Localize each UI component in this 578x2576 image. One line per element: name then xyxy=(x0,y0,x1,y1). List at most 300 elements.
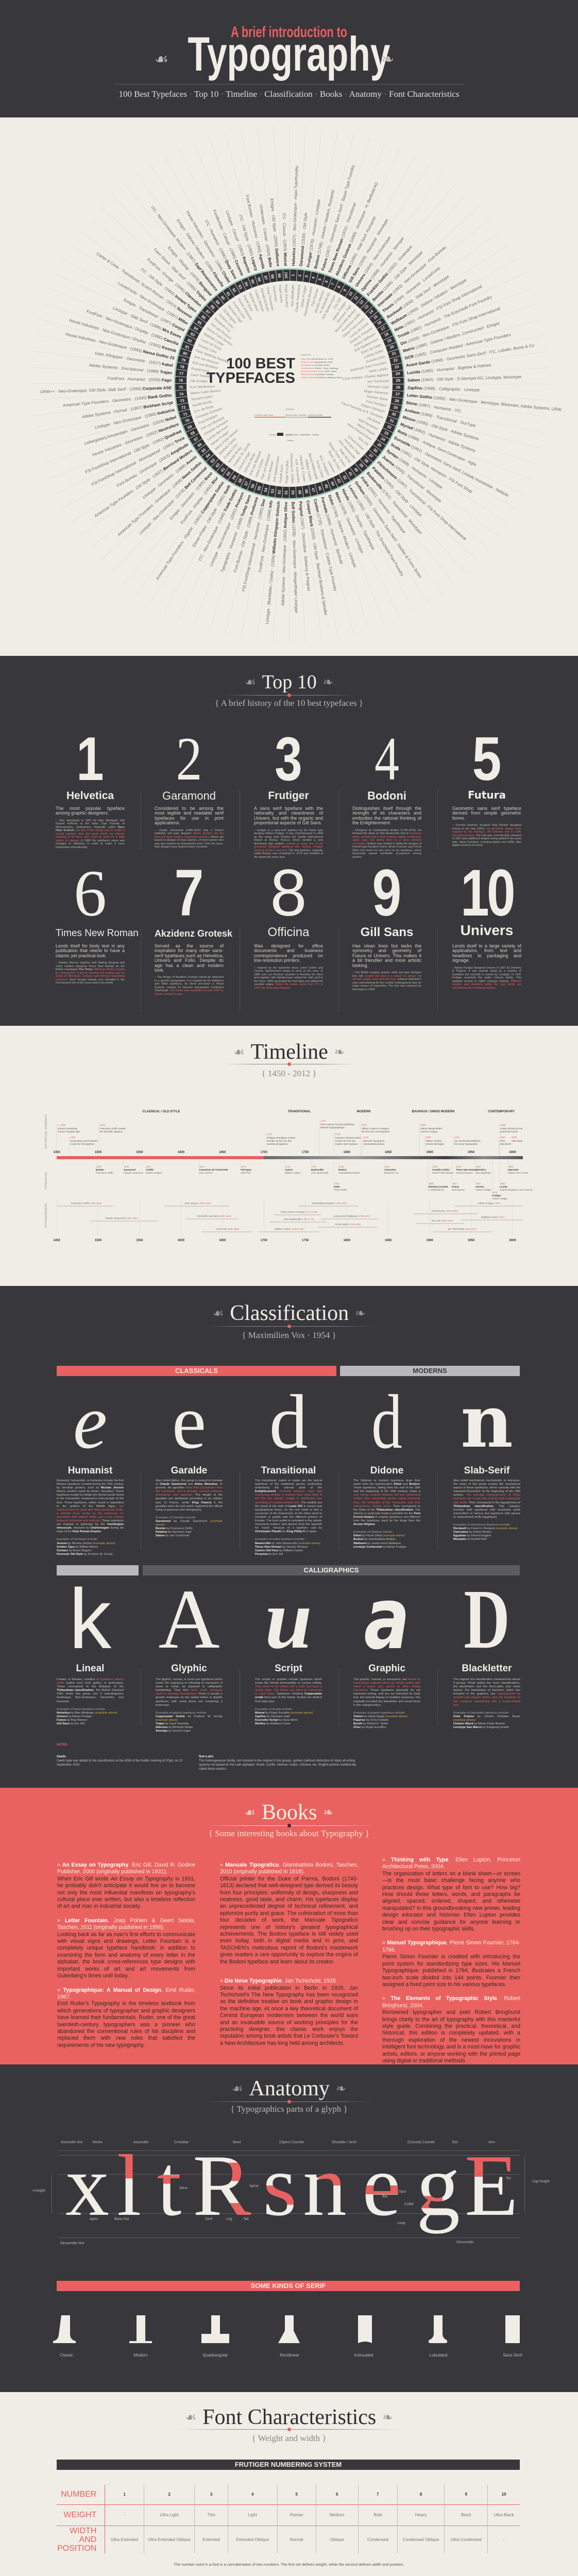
title: Typography: Typography xyxy=(188,27,390,81)
typographers: Claude Garamond 1480-1561 xyxy=(105,1217,138,1220)
panel: 100 best typefaces wheel: Minion (1990) · Old Style · Adobe Systems xyxy=(402,415,479,441)
panel: 100 best typefaces wheel: Jan Tschichold xyxy=(367,379,389,384)
heading: Anatomy: { Typographics parts of a glyph } xyxy=(230,2104,348,2114)
typographers: Giambattista Bodoni 1740-1813 xyxy=(312,1202,347,1205)
panel: 100 best typefaces wheel: 51 xyxy=(284,490,288,495)
typefaces: Claude Garamond xyxy=(124,1172,143,1174)
panel: 100 best typefaces wheel: Scala (1991) · Old Style, Humanist · FSI Font Shop xyxy=(390,442,473,494)
typefaces: 1932 xyxy=(456,1165,462,1168)
panel: 100 best typefaces wheel: Aldo Novarese xyxy=(358,418,379,431)
top10 item 2: Garamond xyxy=(155,724,224,849)
serif: classic xyxy=(53,2315,76,2343)
typographers: Paul Renner 1878-1956 xyxy=(432,1210,458,1213)
serif: modern xyxy=(129,2315,152,2343)
panel: 100 best typefaces wheel: 84 xyxy=(193,326,199,332)
panel: 100 best typefaces wheel: Din (1926) · Neo-Grotesque · FSI Font Shop International xyxy=(400,306,501,346)
class: Humanist: Humanist, humanistic, or humanes include the first Roman typefaces created during the 15th century by Venetian printers, such as Nicolas Jenson (hence another name for these, Venetian). These typefaces sought to imitate the formal hands found in the humanistic renaissance manuscripts of the time. These typefaces, rather round in opposition to the gothics of the Middle Ages, are characterized by short and thick bracketed serifs, a slanted cross stroke on the lowercase 'e', ascenders with slanted serifs, and a low contrast between horizontal and verticals. These typefaces are inspired in particular by the Carolingian minuscule, imposed by Charlemagne during his reign of the Holy Roman Empire. Jenson by Nicolas Jenson (example above) xyxy=(57,1479,124,1545)
panel: 100 best typefaces wheel: 100 xyxy=(284,272,288,279)
wheel legend: Designer xyxy=(269,434,277,436)
panel: 100 best typefaces wheel: Lettergieterij Amsterdam · Geometric · (1929) Nobel xyxy=(84,415,177,446)
table: frutiger numbering: Thin xyxy=(207,2513,215,2517)
historical moments: the first sans serif typeface xyxy=(362,1130,390,1133)
heading: Anatomy: ☙ xyxy=(232,2081,243,2096)
typefaces: Jean Jannon xyxy=(199,1172,213,1174)
panel: top 10 xyxy=(0,656,578,1026)
panel: 100 best typefaces wheel: Underware · Casual · (2004) Bello xyxy=(259,205,273,268)
panel: 100 best typefaces wheel: 90 xyxy=(220,295,226,301)
panel: 100 best typefaces wheel: Adrian Frutiger xyxy=(332,300,348,321)
typographers: Firmin Didot 1764-1836 xyxy=(335,1223,361,1226)
historical moments: 1886 xyxy=(420,1124,426,1126)
typographers: Jean Jannon 1580-1658 xyxy=(184,1202,211,1205)
historical moments: 1928 xyxy=(454,1136,460,1139)
panel: 100 best typefaces wheel: Erik van Blokland xyxy=(249,451,263,476)
year axis top: 1600 xyxy=(178,1151,185,1154)
panel: 100 best typefaces wheel: Akzidenz Grotesk (1898) · Grotesque · H. Berthold AG xyxy=(334,181,379,277)
anatomy glyph diagram xyxy=(65,2137,518,2234)
wheel center title: Roger Black (Danilo Black Inc., USA) xyxy=(301,358,333,360)
vertical row labels: TYPOGRAPHERS xyxy=(45,1203,48,1228)
books column 1 xyxy=(57,1862,195,2048)
heading: Anatomy xyxy=(208,2077,370,2114)
panel: 100 best typefaces wheel: Michael Want xyxy=(248,292,259,312)
panel: 100 best typefaces wheel: Lucas de Groot xyxy=(349,322,369,339)
panel: 100 best typefaces wheel: 72 xyxy=(181,405,186,410)
panel: 100 best typefaces wheel: Erik Spiekermann xyxy=(273,455,280,482)
panel: 100 best typefaces wheel: 33 xyxy=(383,430,389,436)
panel: 100 best typefaces wheel: 31 xyxy=(389,418,395,423)
panel: 100 best typefaces wheel: House Industries xyxy=(237,298,253,321)
table: frutiger numbering: NUMBER xyxy=(61,2490,96,2499)
typefaces: Caractères de l'Université xyxy=(199,1168,228,1171)
anatomy labels: Bowl xyxy=(233,2141,241,2144)
class: Blackletter: Examples of blackletter typefaces include: xyxy=(453,1711,509,1715)
class: Transitional: Examples of realist typefaces include: xyxy=(255,1538,305,1541)
panel: 100 best typefaces wheel: Morris Fuller Benton xyxy=(206,327,233,347)
historical moments: William Caslon IV designs xyxy=(362,1127,389,1130)
historical moments: François Ambroise Didot xyxy=(335,1137,361,1139)
panel: 100 best typefaces wheel: Emigre · Transitional · (1997) Corpid xyxy=(123,298,185,333)
panel: 100 best typefaces wheel: Ronald Arnholm xyxy=(260,288,269,312)
panel: 100 best typefaces wheel: FontFont · Neo-Grotesque · (1996) Info xyxy=(258,500,274,572)
typographers: Pierre Simon Fournier 1712-1768 xyxy=(281,1211,318,1214)
typographers: Jan Tschichold 1902-1974 xyxy=(448,1228,477,1231)
book: Die Neue Typographie: Since its initial publication in Berlin in 1928, Jan Tschichold's The New Typography has been recognized as the definitive treatise on book and graphic design in the machine age. At once a key theoretical document of Central European modernism between the world wars and an invaluable source of working principles for the practicing designer, this classic work enjoys the reputation among book artists that Le Corbusier's Toward a New Architecture has long held among architects. xyxy=(220,1985,358,2046)
class: Slab-Serif: Clarendon by Robert Besley xyxy=(453,1531,491,1534)
panel: 100 best typefaces wheel: Volker Küster xyxy=(254,458,265,478)
anatomy labels: Arm xyxy=(488,2141,495,2144)
table: frutiger numbering: 2 xyxy=(168,2492,171,2497)
class: Lineal: Lineal xyxy=(76,1663,104,1674)
typefaces: Tobias Frere-Jones xyxy=(508,1172,529,1174)
panel: 100 best typefaces wheel: Carol Twombly & R. Slimbach xyxy=(341,401,384,420)
anatomy labels: x-height xyxy=(32,2189,45,2193)
panel: 100 best typefaces wheel: 5 xyxy=(317,278,322,281)
panel: 100 best typefaces wheel: Interstate (1993) · Neo-Grotesque · Font Bureau xyxy=(377,245,447,308)
panel: 100 best typefaces wheel: 92 xyxy=(231,287,237,293)
typefaces: Max Miedinger xyxy=(475,1172,491,1174)
anatomy labels: Spur xyxy=(399,2190,406,2194)
panel: 100 best typefaces wheel: 2 xyxy=(297,274,302,277)
panel: 100 best typefaces wheel: FSI FontShop International · Old Style · (1992) Quadraat xyxy=(84,429,182,474)
heading: Books: ☙ xyxy=(244,1805,256,1820)
panel: 100 best typefaces wheel: ITC · Old Style · (1992) Legacy xyxy=(238,214,259,272)
class: Lineal: Futura by Paul Renner xyxy=(57,1719,88,1722)
table: frutiger numbering: Ultra Condensed xyxy=(451,2537,482,2542)
panel: 100 best typefaces wheel: Hans Eduard Meier xyxy=(347,422,373,442)
anatomy labels: (Open) Counter xyxy=(279,2141,304,2144)
anatomy labels: Spine xyxy=(249,2184,259,2188)
panel: 100 best typefaces wheel: 70 xyxy=(184,418,190,423)
top10 item 5: Futura: – German typeface designer Paul Renner designed Futura in the mid 1920's. Its geometric shapes were inspired by the Bauhaus, the German arts & crafts school/movement. The font was commercially released in 1927 with additional weights being added in the years after. Many foundries, including Adobe and URW, offer digital versions of Futura. xyxy=(452,824,521,847)
panel: 100 best typefaces wheel: Adobe Systems · Formal · (1997) Bickham Script xyxy=(82,400,174,419)
anatomy labels: Ascender xyxy=(133,2141,149,2144)
panel: 100 best typefaces wheel: 87 xyxy=(205,309,211,315)
panel: 100 best typefaces wheel: Stanley Morison xyxy=(314,290,326,314)
panel: 100 best typefaces wheel: Robert Slimbach xyxy=(361,403,385,414)
panel: 100 best typefaces wheel: 24 xyxy=(395,371,400,376)
top10 item 7: Akzidenz Grotesk: 7 xyxy=(175,856,203,930)
panel: 100 best typefaces wheel: 22 xyxy=(393,358,398,363)
panel: 100 best typefaces wheel: 80 xyxy=(182,351,188,357)
typefaces: 1621 xyxy=(199,1165,205,1168)
class: Lineal: Univers by Adrian Frutiger xyxy=(57,1715,92,1718)
bar: some kinds of serif: SOME KINDS OF SERIF xyxy=(251,2282,326,2290)
panel: 100 best typefaces wheel: FSI FontShop International · Humanist · (1995) Dax xyxy=(241,498,266,592)
panel: 100 best typefaces wheel: 52 xyxy=(277,489,282,495)
panel: 100 best typefaces wheel: Emigre · Old Style · (2000) Dalliance xyxy=(269,198,280,267)
anatomy glyph diagram: e xyxy=(362,2137,401,2234)
panel: 100 best typefaces wheel: 18 xyxy=(383,331,389,337)
top10 item 10: Univers: Univers xyxy=(461,922,513,938)
year axis bottom: 1800 xyxy=(344,1239,351,1242)
heading: Classification: Classification xyxy=(230,1301,349,1325)
table: frutiger numbering: 5 xyxy=(295,2492,298,2497)
class: Glyphic: A xyxy=(158,1572,220,1666)
panel: 100 best typefaces wheel: 7 xyxy=(330,282,335,286)
panel: 100 best typefaces wheel: David Quay xyxy=(242,295,253,312)
panel: 100 best typefaces wheel: 74 xyxy=(179,392,184,397)
typefaces: Giambattista Bodoni xyxy=(338,1172,360,1174)
class: Script: Kuenstler Script by Hans Bohn xyxy=(255,1719,298,1722)
class: Garalde: Palatino by Hermann Zapf xyxy=(156,1531,191,1534)
historical moments: Giambattista Bodoni xyxy=(363,1143,384,1145)
panel: 100 best typefaces wheel: Richard Lipton xyxy=(191,395,213,402)
panel: 100 best typefaces wheel: Chauncey H. Griffith xyxy=(290,453,294,483)
panel: 100 best typefaces wheel: ITC · Neo-Grotesque, Modern · (1987) Zapf Renaissance xyxy=(150,205,219,293)
top10 item 9: Gill Sans: Has clean lines but lacks the symmetry and geometry of Futura or Univers. This makes it a bit friendlier and more artistic looking. xyxy=(352,943,421,968)
panel: 100 best typefaces wheel xyxy=(30,125,562,643)
panel: 100 best typefaces wheel: 91 xyxy=(225,291,231,297)
typefaces: 1994 xyxy=(508,1165,514,1168)
panel: 100 best typefaces wheel: Matrix (1986) · Didone / Modern, Constructed · Emigre xyxy=(402,321,500,353)
historical moments: the first italic typeface xyxy=(100,1130,123,1133)
year axis top: 1450 xyxy=(53,1151,60,1154)
notes: Non-Latin xyxy=(199,1755,213,1758)
panel: 100 best typefaces wheel: Bram de Does xyxy=(361,343,382,355)
panel: 100 best typefaces wheel: Peter Matthias Noordzij xyxy=(195,349,229,364)
serif shapes: Quadrangular xyxy=(203,2353,228,2358)
typefaces: 1927 xyxy=(452,1182,457,1185)
typefaces: Garamond xyxy=(124,1168,135,1171)
panel: 100 best typefaces wheel: Christian Schwartz xyxy=(196,407,223,420)
top10 item 5: Futura: Geometric sans serif typeface derived from simple geometric forms. xyxy=(452,806,521,821)
panel: 100 best typefaces wheel: Arnhem (1999) · Transitional · OurType xyxy=(404,408,477,428)
class: Didone xyxy=(353,1379,420,1549)
table: frutiger numbering: 7 xyxy=(377,2492,379,2497)
historical moments: Philippe Grandjean creates xyxy=(267,1137,296,1139)
book: Thinking with Type: The organization of letters on a blank sheet—or screen—is the most basic challenge facing anyone who practices design. What type of font to use? How big? How should those letters, words, and paragraphs be aligned, spaced, ordered, shaped, and otherwise manipulated? In this groundbreaking new primer, leading design educator and historian Ellen Lupton provides clear and concise guidance for anyone learning or brushing up on their typographic skills. xyxy=(382,1871,520,1932)
historical moments: 1984 xyxy=(500,1136,506,1139)
class: Garalde: Also called Aldine, this group is named in homage to Claude Garamond and Aldus Manutius. In general, the garaldes have finer proportions than the humanists, and a stronger contrast between downstroke and upstroke. The weight of the garaldes are distributed according to an oblique axis. In France, under King Francis I, the garaldes were the tool which supported the official fixing of grammar and orthography. Garamond by Claude Garamond (example above) xyxy=(156,1479,223,1527)
year axis bottom: 1950 xyxy=(468,1239,475,1242)
class: Didone: d xyxy=(371,1379,402,1465)
panel: 100 best typefaces wheel: Typography · Humanist · (1988) Today Sans xyxy=(220,494,252,573)
table: frutiger numbering: Extended xyxy=(202,2537,220,2542)
panel: 100 best typefaces wheel: Sumner Stone xyxy=(366,395,388,402)
typefaces: Robert Granjon xyxy=(146,1172,162,1174)
panel: 100 best typefaces wheel: Sabon (1964) · Old Style · D.Stempel AG, Linotype, Monotype xyxy=(407,375,522,383)
top10 item 8: Officina: Was designed for office documents and business correspondence produced on low-resolution printers. xyxy=(254,943,323,963)
panel: 100 best typefaces wheel: Hermann Zapf xyxy=(343,438,361,456)
panel: 100 best typefaces wheel: Benjamin Fox xyxy=(213,317,231,334)
panel: 100 best typefaces wheel: Fleischmann (1997) · Transitional · FSI Font Shop International xyxy=(376,460,467,541)
class: Graphic: Choc by Roger Excoffon xyxy=(353,1726,386,1729)
typographers: Matthew Carter 1937- xyxy=(481,1216,505,1219)
panel: 100 best typefaces wheel: Officina (1990) · Slab Serif, Humanist xyxy=(341,215,377,280)
heading: Classification: { Maximilien Vox · 1954 } xyxy=(242,1330,336,1340)
class: Slab-Serif: Slab-Serif xyxy=(464,1465,509,1476)
panel: 100 best typefaces wheel: 97 xyxy=(263,275,268,280)
top10 item 1: Helvetica xyxy=(56,724,125,849)
class: Humanist: Examples of Humanes include: xyxy=(57,1538,98,1541)
top10 item 7: Akzidenz Grotesk: Served as the source of inspiration for many other sans-serif typefaces such as Helvetica, Univers and Folio. Despite its age has a clean and modern look. xyxy=(155,943,224,973)
period labels: BAUHAUS / SWISS MODERN xyxy=(412,1110,454,1113)
table: frutiger numbering: Black xyxy=(461,2513,471,2517)
panel: 100 best typefaces wheel: Morris Fuller Benton xyxy=(191,389,221,396)
serif shapes: Sans-Serif xyxy=(503,2353,522,2358)
panel: 100 best typefaces wheel: 95 xyxy=(250,279,256,284)
panel: 100 best typefaces wheel: A.M. Cassandre xyxy=(294,459,300,483)
panel: 100 best typefaces wheel: S.H. de Roos xyxy=(194,404,214,414)
bar: lineal (grey) xyxy=(57,1565,139,1575)
top10 item 2: Garamond: Garamond xyxy=(162,789,216,802)
anatomy labels: Loop xyxy=(397,2222,405,2225)
class: Blackletter: D xyxy=(464,1572,510,1666)
historical moments: Jan Tschichold publishes xyxy=(454,1140,481,1142)
panel: 100 best typefaces wheel: House Industries · Geometric · (2002) Neutraface xyxy=(92,422,180,457)
panel: 100 best typefaces wheel: 85 xyxy=(197,319,202,326)
bar: moderns: MODERNS xyxy=(413,1367,447,1375)
class: Graphic: The graphic, manual, or manuaires, are based on hand-drawn originals which are slowly written with either a brush, pen, pencil, or other writing instrument. These typefaces generally do not represent writing, and are not intended for body text, but instead display or headline purposes. Vox originally included the blackletter and uncial faces in this categorization. Tekton by David Siegel (example above) xyxy=(353,1678,420,1718)
top10 item 7: Akzidenz Grotesk: Akzidenz Grotesk xyxy=(155,928,232,939)
panel: 100 best typefaces wheel: Fedra (2001) · Humanist · Typotheque xyxy=(360,476,407,535)
typefaces: Franklin Gothic xyxy=(432,1168,450,1171)
wheel center title: Analyzed by: xyxy=(301,354,311,356)
panel: 100 best typefaces wheel: Rudolf Koch xyxy=(191,367,210,374)
panel: 100 best typefaces wheel: Eric Gill xyxy=(333,297,342,309)
panel: 100 best typefaces wheel: House Industries · Geometric · (1996) Chalet xyxy=(185,210,231,284)
panel: 100 best typefaces wheel: Font Bureau · Grotesque · (2003) Amplitude xyxy=(116,442,190,488)
heading: Top 10 xyxy=(215,671,363,708)
panel: 100 best typefaces wheel: Tobias Frere-Jones xyxy=(327,442,347,468)
anatomy labels: Descender xyxy=(456,2241,474,2244)
panel: 100 best typefaces wheel: 32 xyxy=(386,424,392,430)
panel: 100 best typefaces wheel: Zuzana Licko xyxy=(366,355,386,364)
panel: 100 best typefaces wheel: Lexicon (1992) · Old Style · The Enschedé Font Foundry xyxy=(347,484,405,577)
year axis top: 1700 xyxy=(261,1151,268,1154)
wheel legend xyxy=(254,409,331,442)
period labels xyxy=(143,1110,515,1113)
top10 item 8: Officina: – Inspired by the typewriter faces Letter Gothic and Courier, Spiekermann began to work on the sans. In 1989 Just van Rossum assisted in finishing the Sans and together with Spiekermann added the slab serif to the Sans. URW generated the font data and added the rounded edges. When the proofs came from ITC in 1990 the family was released. xyxy=(254,967,323,990)
panel: 100 best typefaces wheel: Tobias Frere-Jones xyxy=(342,317,366,339)
table: frutiger numbering: - xyxy=(124,2513,125,2517)
panel: anatomy xyxy=(0,2064,578,2392)
panel: 100 best typefaces wheel: Paul Renner xyxy=(311,287,319,307)
book: Manuel Typographique: Pierre Simon Fournier is credited with introducing the point system for standardizing type sizes. His Manuel Typographique, published in 1764, illustrates a French two-inch scale divided into 144 points. Fournier then assigned a fixed point size to his various typefaces. xyxy=(382,1954,520,1988)
class: Didone: Linotype Centennial by Adrian Frutiger xyxy=(353,1546,406,1549)
heading: Top 10: ☙ xyxy=(245,675,256,689)
typefaces: Civilité xyxy=(146,1168,154,1171)
panel: 100 best typefaces wheel: 37 xyxy=(368,452,374,459)
typefaces: Helvetica xyxy=(475,1168,486,1171)
heading: Anatomy: Anatomy xyxy=(249,2077,330,2100)
panel: books xyxy=(0,1788,578,2064)
panel: 100 best typefaces wheel: 78 xyxy=(180,364,184,369)
panel: 100 best typefaces wheel: 13 xyxy=(363,304,369,310)
top10 item 10: Univers: 10 xyxy=(461,856,513,930)
historical moments: 2000 xyxy=(512,1136,517,1139)
class: Script: The scripts or scriptes include typefaces which evoke the formal penmanship or cursive writing. They seem to be written with a quill, and have a strong slope. The letters can often be connected to each other. Typefaces imitating Copperplate script form part of this family. Scripts are distinct from italic type. Mistral by Roger Excoffon (example above) xyxy=(255,1678,322,1715)
anatomy labels: Base line xyxy=(114,2217,129,2221)
table: frutiger numbering: Heavy xyxy=(415,2513,427,2517)
panel: 100 best typefaces wheel: 9 xyxy=(342,288,347,292)
anatomy labels: Collar xyxy=(404,2202,414,2206)
anatomy labels xyxy=(0,2141,578,2249)
top10 item 6: Times New Roman: Times New Roman xyxy=(56,928,139,939)
anatomy glyph diagram: g xyxy=(416,2137,460,2234)
panel: 100 best typefaces wheel: Rockwell (1934) · Slab Serif · Monotype xyxy=(386,274,450,319)
panel: 100 best typefaces wheel: Justus Walbaum xyxy=(353,332,376,348)
class: Humanist: e xyxy=(73,1379,107,1465)
typographers: Francesco Griffo 1450-1518 xyxy=(71,1202,102,1205)
historical moments: 1985 xyxy=(500,1124,506,1126)
anatomy glyph diagram: l xyxy=(117,2137,141,2234)
historical moments: 1465 xyxy=(70,1136,76,1139)
historical moments: modern style typeface xyxy=(335,1143,358,1145)
table: frutiger numbering: Ultra Black xyxy=(494,2513,514,2517)
wheel legend: Historical Value / Meaning xyxy=(285,414,306,416)
panel: 100 best typefaces wheel: ITC · Casual · (1953) Mistral xyxy=(282,213,288,266)
panel: 100 best typefaces wheel: Frank H. Pierpont xyxy=(349,327,373,345)
top10 item 9: Gill Sans: Gill Sans xyxy=(361,925,413,939)
panel: 100 best typefaces wheel: Eric Gill xyxy=(358,437,369,447)
panel: 100 best typefaces wheel: 12 xyxy=(358,299,365,306)
year axis bottom: 1750 xyxy=(302,1239,309,1242)
notes: Gaelic xyxy=(57,1755,66,1758)
panel: 100 best typefaces wheel: 64 xyxy=(205,452,211,459)
panel: 100 best typefaces wheel: Optima (1958) · Humanist · Stempel xyxy=(360,236,405,292)
panel: 100 best typefaces wheel: Metro (1929) · Geometric · Linotype xyxy=(334,492,365,554)
books column 2 xyxy=(220,1862,358,2046)
class: Humanist: Humanist xyxy=(68,1465,112,1476)
panel: 100 best typefaces wheel: Bell Gothic (1938) · Neo-Grotesque · Mergenthaler Linotype xyxy=(291,502,299,614)
panel: 100 best typefaces wheel: 41 xyxy=(348,471,354,477)
panel: 100 best typefaces wheel: 26 xyxy=(396,385,400,389)
panel: 100 best typefaces wheel: Garamond (1530) · Old Style xyxy=(299,212,308,266)
panel: 100 best typefaces wheel: Didot (1784) · Didone / Modern · Linotype xyxy=(327,494,358,568)
panel: 100 best typefaces wheel: Rudolf Koch xyxy=(279,464,284,483)
typefaces: 1957 xyxy=(475,1165,481,1168)
top10 item 7: Akzidenz Grotesk: – The design of Akzidenz Grotesk cannot be attributed to a specific typographer. It is inspired by the Walbaum and Didot typefaces. Its direct precursor is Royal Grotesk, created by German typographer Ferdinand Theinhardt. The family was expanded around 1960 by Günter Gerhard Lange. xyxy=(155,976,224,996)
serif shapes xyxy=(0,2313,578,2360)
typefaces: Benjamin Fox xyxy=(384,1172,399,1174)
panel: 100 best typefaces wheel: 30 xyxy=(391,411,397,417)
typefaces: Paul Renner xyxy=(452,1189,465,1191)
typefaces: Fell types xyxy=(241,1168,252,1171)
panel: 100 best typefaces wheel: 67 xyxy=(193,436,199,442)
class: Garalde: Garalde xyxy=(171,1465,207,1476)
class: Script xyxy=(255,1572,322,1725)
top10 item 4: Bodoni: Bodoni xyxy=(367,789,406,802)
wheel center title: Bertram Schmidt-Friderichs (FDC, Mainz) xyxy=(301,370,337,372)
anatomy glyph diagram: E xyxy=(465,2137,518,2234)
typographers: Justus Erich Walbaum 1768-1837 xyxy=(333,1215,370,1218)
wheel center title: Veronika Elsner (Elsner + Flake, Hamburg) xyxy=(301,367,338,369)
panel: 100 best typefaces wheel: 17 xyxy=(380,326,386,332)
wheel center title: Jan Middendorp (Flaktion, Berlin) xyxy=(301,364,330,366)
notes: This heterogeneous family, not included in the original 9 Vox groups, gathers (without distinction of style) all writing systems not based on the Latin alphabet: Greek, Cyrillic, Hebrew, Arabic, Chinese, etc. English printers traditionally called these exotics. xyxy=(199,1759,356,1771)
serif: insinuated xyxy=(358,2315,372,2343)
class: Slab-Serif: Memphis by Rudolf Wolf xyxy=(453,1538,486,1541)
wheel center title: Claudia Gorkrode (FontShop, Marketing, Berlin) xyxy=(301,377,343,379)
typefaces: 1976 xyxy=(492,1191,498,1194)
panel: 100 best typefaces wheel: 35 xyxy=(377,442,382,448)
typefaces: 1672 xyxy=(241,1165,246,1168)
typographers: Adrian Frutiger 1928- xyxy=(478,1202,501,1205)
panel: 100 best typefaces wheel: Hermann Zapf xyxy=(227,304,243,324)
typographers: John Baskerville 1706-1775 xyxy=(283,1218,314,1221)
historical moments: Adobe introduces the xyxy=(500,1127,523,1130)
historical moments: 1702 xyxy=(267,1133,273,1136)
anatomy labels: Serif xyxy=(205,2217,212,2221)
panel: 100 best typefaces wheel: American Type Founders xyxy=(350,361,387,372)
historical moments: First xyxy=(500,1140,505,1142)
panel: 100 best typefaces wheel: 42 xyxy=(342,474,348,480)
navigation: 100 Best Typefaces · Top 10 · Timeline · Classification · Books · Anatomy · Font Characteristics xyxy=(119,89,459,99)
panel: 100 best typefaces wheel: Ole Schäfer xyxy=(190,379,208,384)
table: frutiger numbering: Extended Oblique xyxy=(236,2537,269,2542)
panel: 100 best typefaces wheel: Thesis (1994) · Humanist · LucasFonts xyxy=(381,266,441,314)
serif shapes: Lobulated xyxy=(429,2353,448,2358)
historical moments: OpenType xyxy=(512,1140,523,1142)
typefaces: Adrian Frutiger xyxy=(492,1197,508,1200)
table: frutiger numbering: Normal xyxy=(290,2537,303,2542)
panel: 100 best typefaces wheel: Gerard Unger xyxy=(238,451,251,470)
class: Slab-Serif: Egyptian by Vincent Figgins xyxy=(453,1534,491,1537)
heading: Timeline: { 1450 - 2012 } xyxy=(262,1069,316,1078)
panel: 100 best typefaces wheel: 76 xyxy=(179,378,183,383)
class: Slab-Serif: n xyxy=(461,1380,513,1464)
top10 item 8: Officina: Officina xyxy=(268,925,309,939)
panel: 100 best typefaces wheel: Linotype · Casual · (1953) Reporter xyxy=(225,210,251,274)
anatomy glyph diagram: t xyxy=(157,2137,181,2234)
table: frutiger numbering: 9 xyxy=(465,2492,467,2497)
top10 item 5: Futura xyxy=(452,724,521,847)
panel: 100 best typefaces wheel: Gotham (2000) · Geometric Sans-Serif · Hoefler & Frere-Jones xyxy=(354,480,422,579)
typefaces: 1902 xyxy=(432,1165,438,1168)
historical moments: c. 1450 xyxy=(58,1124,66,1126)
